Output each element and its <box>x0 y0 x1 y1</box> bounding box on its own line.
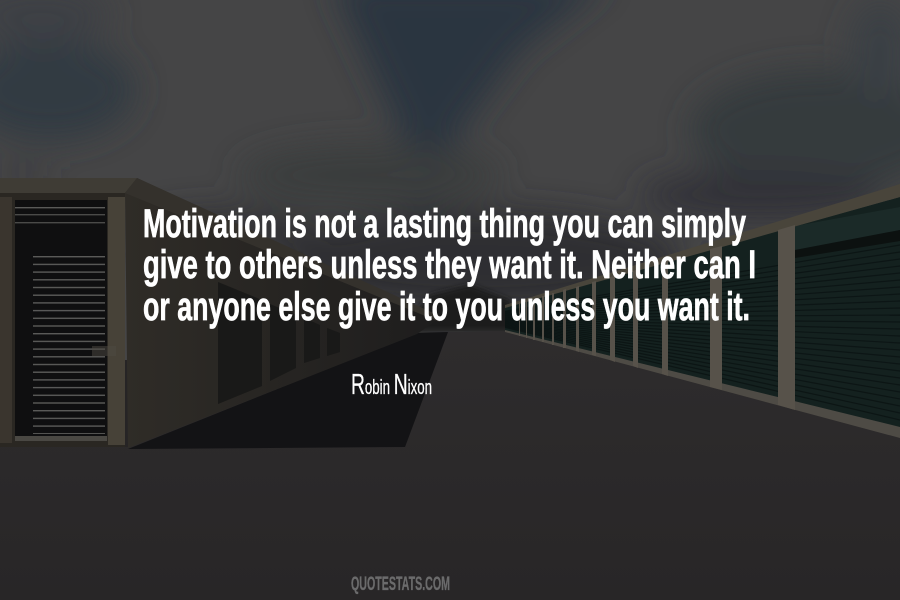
side wall <box>125 178 440 448</box>
far wall and doors <box>505 197 900 437</box>
left storage building <box>0 178 440 448</box>
tree tops <box>0 168 45 180</box>
ground <box>0 331 900 600</box>
roof fascia <box>505 184 900 308</box>
author: Robin Nixon <box>351 369 432 401</box>
distant tree line <box>400 285 520 332</box>
side wall doors <box>218 282 340 404</box>
right post <box>108 197 125 445</box>
dark gap in clouds <box>330 0 610 240</box>
support posts <box>519 225 795 410</box>
door handle <box>92 346 116 356</box>
left post <box>0 197 12 443</box>
roller door <box>15 200 107 441</box>
right storage building <box>465 184 900 438</box>
roof edge <box>125 178 440 322</box>
upper door header <box>795 207 900 250</box>
front face <box>0 193 125 447</box>
door bottom sill <box>505 330 900 438</box>
quote text <box>143 202 756 329</box>
slats <box>465 245 900 420</box>
building shadow on ground <box>128 332 448 449</box>
dark band under header <box>795 230 900 258</box>
watermark: QUOTESTATS.COM <box>351 574 450 595</box>
sky with clouds <box>0 0 900 360</box>
roof fascia <box>0 178 137 193</box>
